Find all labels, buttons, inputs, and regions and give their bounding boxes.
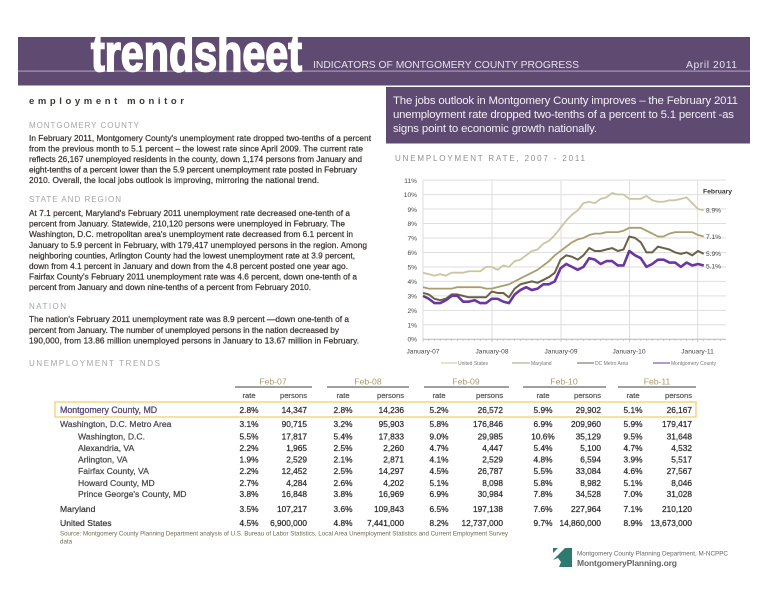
row: Prince George's: 3.8% [240, 489, 259, 499]
row: Prince George's: Prince George's County, MD [78, 489, 186, 499]
text block: Montgomery County: from the previous month to 5.1 percent – the lowest rate since April 2009. The current rate [29, 144, 363, 154]
row: Fairfax: 26,787 [478, 466, 503, 476]
row: Arlington: 1.9% [240, 454, 259, 464]
end labels: 5.9% [706, 251, 721, 258]
table year headers: Feb-08 [354, 376, 382, 386]
y axis labels: 7% [407, 236, 417, 242]
highlight row: Montgomery County: 5.9% [534, 405, 553, 415]
table year headers: Feb-09 [452, 376, 480, 386]
row: Washington Metro: 3.2% [334, 419, 353, 429]
y axis labels: 5% [407, 264, 417, 272]
title: trendsheet: trendsheet [91, 25, 302, 83]
row: Alexandria: 2,260 [383, 443, 404, 453]
text block: State and Region: Fairfax County's February 2011 unemployment rate was 4.6 percent, down one-tenth of a [29, 272, 357, 282]
table column headers: rate [536, 391, 550, 400]
table column headers: persons [574, 391, 601, 400]
row: Howard: 5.8% [534, 478, 553, 488]
text block: Nation: percent from January. The number of unemployed persons in the nation decreased by [29, 325, 340, 335]
row: Howard: Howard County, MD [78, 478, 155, 488]
row: Washington Metro: 6.9% [534, 419, 553, 429]
row: Washington Metro: 5.9% [624, 419, 643, 429]
row: Alexandria [78, 443, 692, 453]
row: United States: 6,900,000 [270, 518, 307, 528]
row: Arlington: 4.8% [534, 454, 553, 464]
highlight row: Montgomery County: 14,236 [379, 405, 404, 415]
text block: Montgomery County: MONTGOMERY COUNTY [29, 121, 140, 130]
y axis labels: 11% [404, 178, 417, 185]
row: Alexandria: 4.7% [430, 443, 449, 453]
row: Washington DC: 35,129 [576, 432, 601, 442]
y axis labels: 8% [407, 221, 417, 228]
row: United States [60, 518, 692, 528]
row: Arlington: 2,529 [286, 454, 307, 464]
row: Washington DC: 31,648 [667, 432, 692, 442]
row: Howard: 8,046 [671, 478, 692, 488]
y axis labels: 3% [407, 294, 417, 300]
row: Washington Metro: 176,846 [473, 419, 503, 429]
end labels [703, 188, 732, 270]
row: Prince George's: 7.8% [534, 489, 553, 499]
row: Howard: 8,098 [482, 478, 503, 488]
legend: United States [458, 361, 489, 367]
highlight row: Montgomery County: 26,167 [667, 405, 692, 415]
source note [60, 530, 509, 546]
text block: State and Region: January to 5.9 percent in February, with 179,417 unemployed persons in the region. Among [29, 240, 367, 250]
row: Howard [78, 478, 692, 488]
text block: Montgomery County: In February 2011, Montgomery County's unemployment rate dropped two-tenths of a percent [29, 133, 372, 143]
row: United States: 14,860,000 [559, 518, 601, 528]
table column headers: persons [665, 391, 692, 400]
row: Maryland [60, 504, 692, 514]
row: Prince George's: 16,969 [379, 489, 404, 499]
row: Alexandria: 1,965 [286, 443, 307, 453]
icon: planning mark [553, 548, 572, 567]
row: Fairfax: 4.5% [430, 466, 449, 476]
row: Fairfax: 2.2% [240, 466, 259, 476]
text block: State and Region: STATE AND REGION [29, 195, 121, 204]
table year headers: Feb-10 [550, 376, 578, 386]
row: United States: 8.2% [430, 518, 449, 528]
row: Washington DC: 9.0% [430, 432, 449, 442]
row: Prince George's: 6.9% [430, 489, 449, 499]
row: United States: 4.8% [334, 518, 353, 528]
y axis labels [404, 178, 417, 344]
row: Washington Metro: 95,903 [379, 419, 404, 429]
legend [441, 361, 717, 367]
row: Washington DC: 5.5% [240, 432, 259, 442]
table year headers [235, 376, 696, 387]
row: United States: 8.9% [624, 518, 643, 528]
row: Prince George's: 16,848 [282, 489, 307, 499]
callout: jobs outlook: unemployment rate dropped two-tenths of a percent to 5.1 percent -as [393, 109, 734, 121]
x axis labels: January-10 [612, 348, 646, 356]
header band [18, 25, 750, 86]
row: Arlington: 2,529 [482, 454, 503, 464]
x axis labels: January-09 [544, 348, 578, 356]
highlight row: Montgomery County: 2.8% [240, 405, 259, 415]
row: Washington DC: 5.4% [334, 432, 353, 442]
x axis labels: January-07 [406, 348, 440, 356]
text block: Montgomery County: reflects 26,167 unemployed residents in the county, down 1,174 persons from January and [29, 154, 362, 164]
row: Washington DC [78, 432, 692, 442]
text block: State and Region: down from 4.1 percent in January and down from the 4.8 percent posted one year ago. [29, 261, 348, 271]
row: Fairfax: 14,297 [379, 466, 404, 476]
row: Washington Metro: 90,715 [282, 419, 307, 429]
row: Fairfax: Fairfax County, VA [78, 466, 149, 476]
row: Prince George's: 7.0% [624, 489, 643, 499]
row: Alexandria: 2.5% [334, 443, 353, 453]
y axis labels: 6% [407, 250, 417, 257]
row: Howard: 4,202 [383, 478, 404, 488]
table year headers: Feb-07 [259, 376, 287, 386]
row: Maryland: 7.1% [624, 504, 643, 514]
highlight row: Montgomery County: 14,347 [282, 405, 307, 415]
legend: Maryland [531, 361, 552, 367]
highlight row: Montgomery County: 5.2% [430, 405, 449, 415]
row: United States: 7,441,000 [367, 518, 404, 528]
heading: employment monitor: employment monitor [29, 96, 184, 107]
heading: unemployment trends: UNEMPLOYMENT TRENDS [29, 359, 160, 368]
text block: Montgomery County: eight-tenths of a percent lower than the 5.9 percent unemployment rate posted in February [29, 164, 358, 174]
date: April 2011 [686, 60, 737, 71]
row: Maryland: Maryland [60, 504, 96, 514]
highlight row: Montgomery County: Montgomery County, MD [60, 405, 157, 415]
row: Howard: 5.1% [430, 478, 449, 488]
row: United States: 12,737,000 [461, 518, 503, 528]
text block: Nation: NATION [29, 302, 66, 311]
table column headers: persons [377, 391, 404, 400]
callout: jobs outlook [386, 87, 750, 144]
row: Howard: 2.6% [334, 478, 353, 488]
data lines [423, 193, 704, 303]
line: Montgomery County [423, 251, 704, 303]
row: Alexandria: 5.4% [534, 443, 553, 453]
row: Arlington: Arlington, VA [78, 454, 128, 464]
row: United States: 13,673,000 [650, 518, 692, 528]
row: Washington DC: 10.6% [531, 432, 555, 442]
row: Washington Metro: 179,417 [662, 419, 692, 429]
row: Alexandria: 4,532 [671, 443, 692, 453]
table column headers: rate [242, 391, 256, 400]
highlight row: Montgomery County: 26,572 [478, 405, 503, 415]
data table [55, 376, 696, 528]
text block: Nation [29, 302, 359, 346]
row: Washington Metro [60, 419, 692, 429]
row: Arlington: 4.1% [430, 454, 449, 464]
row: Washington DC: 29,985 [478, 432, 503, 442]
table column headers: rate [336, 391, 350, 400]
end labels: February [703, 188, 732, 196]
legend: Montgomery County [671, 361, 717, 367]
table column headers: rate [626, 391, 640, 400]
highlight row: Montgomery County [55, 402, 696, 417]
text block: State and Region: percent from January and down nine-tenths of a percent from February 2010. [29, 282, 311, 292]
row: Arlington: 6,594 [580, 454, 601, 464]
text block: State and Region [29, 195, 367, 292]
row: Arlington: 3.9% [624, 454, 643, 464]
row: Fairfax: 33,084 [576, 466, 601, 476]
source note: data [60, 538, 73, 546]
end labels: 7.1% [706, 234, 721, 241]
logo: Montgomery Planning [553, 548, 728, 568]
row: Prince George's: 31,028 [667, 489, 692, 499]
row: Prince George's: 3.8% [334, 489, 353, 499]
row: Alexandria: 5,100 [580, 443, 601, 453]
y axis labels: 0% [407, 336, 417, 344]
line: Maryland [423, 228, 704, 289]
table year headers: Feb-11 [644, 376, 671, 386]
row: Maryland: 109,843 [374, 504, 404, 514]
logo: Montgomery Planning: MontgomeryPlanning.org [577, 558, 677, 568]
row: Alexandria: 2.2% [240, 443, 259, 453]
row: Fairfax [78, 466, 692, 476]
row: Arlington: 2.1% [334, 454, 353, 464]
row: Fairfax: 27,567 [667, 466, 692, 476]
callout: jobs outlook: signs point to economic growth nationally. [393, 123, 597, 135]
row: Washington DC: 9.5% [624, 432, 643, 442]
row: Howard: 2.7% [240, 478, 259, 488]
y axis labels: 4% [407, 279, 417, 286]
row: Maryland: 107,217 [277, 504, 307, 514]
table column headers: persons [280, 391, 307, 400]
row: Fairfax: 5.5% [534, 466, 553, 476]
x axis labels: January-11 [681, 348, 714, 356]
text block: State and Region: percent from January. Statewide, 210,120 persons were unemployed in February. The [29, 218, 345, 228]
highlight row: Montgomery County: 2.8% [334, 405, 353, 415]
row: Maryland: 227,964 [571, 504, 601, 514]
row: Fairfax: 2.5% [334, 466, 353, 476]
row: Arlington: 2,871 [383, 454, 404, 464]
row: Fairfax: 12,452 [282, 466, 307, 476]
table column headers: rate [432, 391, 446, 400]
highlight row: Montgomery County: 29,902 [576, 405, 601, 415]
y axis labels: 1% [407, 322, 417, 330]
logo: Montgomery Planning: Montgomery County Planning Department, M-NCPPC [577, 550, 728, 558]
row: Washington Metro: 209,960 [571, 419, 601, 429]
text block: State and Region: neighboring counties, Arlington County had the lowest unemployment rate at 3.9 percent, [29, 250, 355, 260]
row: Maryland: 3.6% [334, 504, 353, 514]
line: DC Metro Area [423, 236, 704, 300]
text block: Montgomery County [29, 121, 372, 185]
text block: Nation: The nation's February 2011 unemployment rate was 8.9 percent —down one-tenth of a [29, 314, 349, 324]
row: Prince George's: 34,528 [576, 489, 601, 499]
row: Alexandria: 4,447 [482, 443, 503, 453]
table column headers [242, 391, 692, 400]
line chart: unemployment rate [404, 178, 732, 367]
row: Arlington: 5,517 [671, 454, 692, 464]
text block: State and Region: Washington, D.C. metropolitan area's unemployment rate decreased from 6.1 percent in [29, 229, 353, 239]
row: United States: United States [60, 518, 112, 528]
text block: Montgomery County: 2010. Overall, the local jobs outlook is improving, mirroring the national trend. [29, 175, 319, 185]
row: Washington Metro: 5.8% [430, 419, 449, 429]
row: Fairfax: 4.6% [624, 466, 643, 476]
end labels: 8.9% [706, 208, 721, 214]
row: Maryland: 7.6% [534, 504, 553, 514]
y axis labels: 2% [407, 308, 417, 315]
callout: jobs outlook: The jobs outlook in Montgomery County improves – the February 2011 [393, 95, 738, 107]
row: Maryland: 6.5% [430, 504, 449, 514]
source note: Source: Montgomery County Planning Department analysis of U.S. Bureau of Labor Statistics, Local Area Unemployment Statistics and Current Employment Survey [60, 530, 509, 538]
row: Washington Metro: Washington, D.C. Metro Area [60, 419, 172, 429]
row: Arlington [78, 454, 692, 464]
row: Prince George's [78, 489, 692, 499]
row: Howard: 4,284 [286, 478, 307, 488]
end labels: 5.1% [706, 264, 721, 270]
x axis labels: January-08 [476, 348, 509, 356]
row: Washington DC: 17,833 [379, 432, 404, 442]
text block: State and Region: At 7.1 percent, Maryland's February 2011 unemployment rate decreased one-tenth of a [29, 208, 350, 218]
highlight row: Montgomery County: 5.1% [624, 405, 643, 415]
row: Howard: 5.1% [624, 478, 643, 488]
row: Maryland: 210,120 [662, 504, 692, 514]
row: Alexandria: Alexandria, VA [78, 443, 134, 453]
row: Washington DC: Washington, D.C. [78, 432, 145, 442]
row: Alexandria: 4.7% [624, 443, 643, 453]
row: Maryland: 197,138 [473, 504, 503, 514]
row: Washington Metro: 3.1% [240, 419, 259, 429]
row: United States: 4.5% [240, 518, 259, 528]
line: United States [423, 193, 704, 276]
table column headers: persons [476, 391, 503, 400]
subtitle: INDICATORS OF MONTGOMERY COUNTY PROGRESS [313, 60, 579, 71]
row: Washington DC: 17,817 [282, 432, 307, 442]
heading: chart: UNEMPLOYMENT RATE, 2007 - 2011 [395, 154, 586, 163]
legend: DC Metro Area [595, 361, 628, 367]
y axis labels: 9% [407, 207, 417, 214]
row: United States: 9.7% [534, 518, 553, 528]
y axis labels: 10% [404, 192, 417, 199]
row: Howard: 8,982 [580, 478, 601, 488]
row: Prince George's: 30,984 [478, 489, 503, 499]
x axis labels [406, 348, 714, 356]
row: Maryland: 3.5% [240, 504, 259, 514]
text block: Nation: 190,000, from 13.86 million unemployed persons in January to 13.67 million in February. [29, 336, 359, 346]
